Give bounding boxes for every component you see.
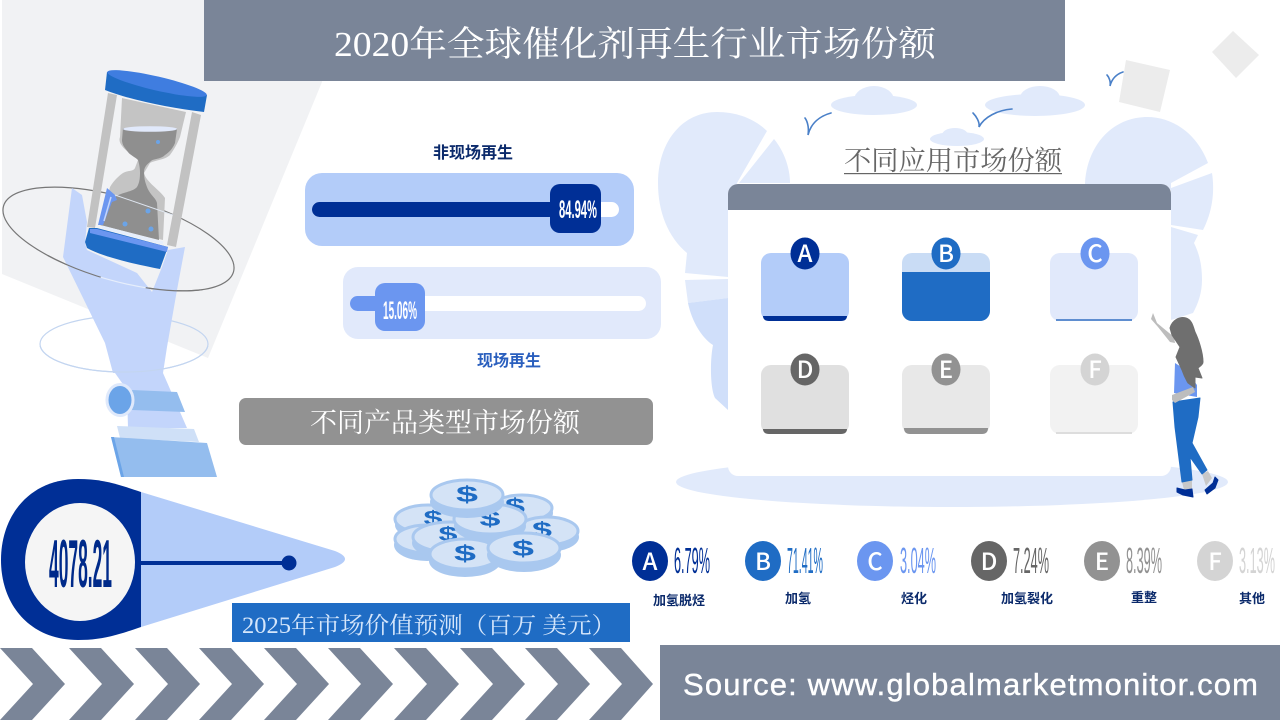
progress bar: on-site regeneration: 现场再生 bbox=[477, 347, 541, 371]
decorative pie blobs and clouds behind card bbox=[658, 86, 1213, 320]
legend: application shares: 3.04% bbox=[900, 540, 936, 581]
icon: coins: $ bbox=[480, 508, 501, 531]
legend: application shares: F bbox=[1208, 542, 1222, 577]
tile D: D bbox=[797, 350, 813, 385]
forecast label bbox=[232, 603, 630, 642]
legend: application shares: 加氢 bbox=[785, 588, 811, 607]
tile F bbox=[1050, 350, 1138, 434]
tile C: C bbox=[1087, 234, 1103, 269]
icon: coins bbox=[394, 480, 579, 577]
legend: application shares: 71.41% bbox=[787, 540, 823, 581]
legend: application shares: 8.39% bbox=[1126, 540, 1162, 581]
icon: coins: $ bbox=[532, 519, 553, 542]
icon: coins: $ bbox=[505, 494, 525, 519]
ground ellipse bbox=[676, 457, 1228, 507]
tile E bbox=[902, 350, 990, 434]
forecast marker bbox=[1, 479, 345, 640]
front of orbit rings bbox=[48, 255, 203, 292]
tile A: A bbox=[798, 234, 813, 269]
title banner: 2020年全球催化剂再生行业市场份额 bbox=[334, 25, 937, 64]
orbit rings bbox=[0, 166, 245, 312]
progress bar: off-site regeneration: 非现场再生 bbox=[433, 139, 513, 163]
panel: application cards bbox=[728, 184, 1171, 476]
icon: paper squares bbox=[1119, 31, 1259, 112]
progress bar: off-site regeneration bbox=[305, 139, 634, 246]
tile F: F bbox=[1088, 350, 1102, 385]
icon: woman pointing bbox=[1151, 313, 1218, 497]
tile A bbox=[761, 234, 849, 321]
tile D bbox=[761, 350, 849, 434]
source banner: Source: www.globalmarketmonitor.com bbox=[683, 667, 1258, 702]
legend: application shares: 加氢裂化 bbox=[1001, 588, 1053, 607]
legend: application shares: 重整 bbox=[1131, 587, 1157, 606]
legend: application shares: B bbox=[755, 542, 771, 577]
legend: application shares: C bbox=[867, 542, 883, 577]
legend: application shares: D bbox=[981, 542, 997, 577]
tile E: E bbox=[939, 350, 953, 385]
heading: product type market share bbox=[239, 398, 653, 445]
legend: application shares: 烃化 bbox=[901, 588, 927, 607]
icon: birds bbox=[805, 72, 1123, 135]
legend: application shares: 加氢脱烃 bbox=[653, 590, 705, 609]
background light panel bbox=[2, 0, 340, 358]
icon: coins: $ bbox=[512, 536, 534, 561]
progress bar: off-site regeneration: 84.94% bbox=[559, 196, 597, 224]
legend: application shares: E bbox=[1095, 542, 1109, 577]
heading: product type market share: 不同产品类型市场份额 bbox=[310, 408, 581, 438]
legend: application shares: 其他 bbox=[1239, 588, 1265, 607]
tile C bbox=[1050, 234, 1138, 321]
legend: application shares: 6.79% bbox=[674, 540, 710, 581]
forearm and cuffs bbox=[115, 373, 187, 428]
progress bar: on-site regeneration: 15.06% bbox=[383, 297, 417, 325]
heading: application market share: 不同应用市场份额 bbox=[844, 146, 1063, 176]
tile B bbox=[902, 234, 990, 321]
chevron arrows bbox=[0, 648, 653, 720]
forecast label: 2025年市场价值预测（百万 美元） bbox=[242, 613, 616, 638]
forecast marker: 4078.21 bbox=[49, 526, 112, 602]
icon: coins: $ bbox=[456, 482, 478, 507]
title banner bbox=[204, 0, 1065, 81]
progress bar: on-site regeneration bbox=[343, 267, 661, 371]
icon: coins: $ bbox=[454, 541, 476, 566]
icon: hand holding hourglass bbox=[0, 65, 245, 477]
icon: coins: $ bbox=[438, 524, 458, 546]
legend: application shares bbox=[632, 540, 1275, 609]
legend: application shares: A bbox=[643, 542, 658, 577]
hand bbox=[63, 188, 185, 373]
hourglass bbox=[85, 65, 208, 269]
tile B: B bbox=[938, 234, 954, 269]
source banner bbox=[660, 645, 1280, 720]
legend: application shares: 7.24% bbox=[1013, 540, 1049, 581]
icon: coins: $ bbox=[424, 508, 442, 530]
